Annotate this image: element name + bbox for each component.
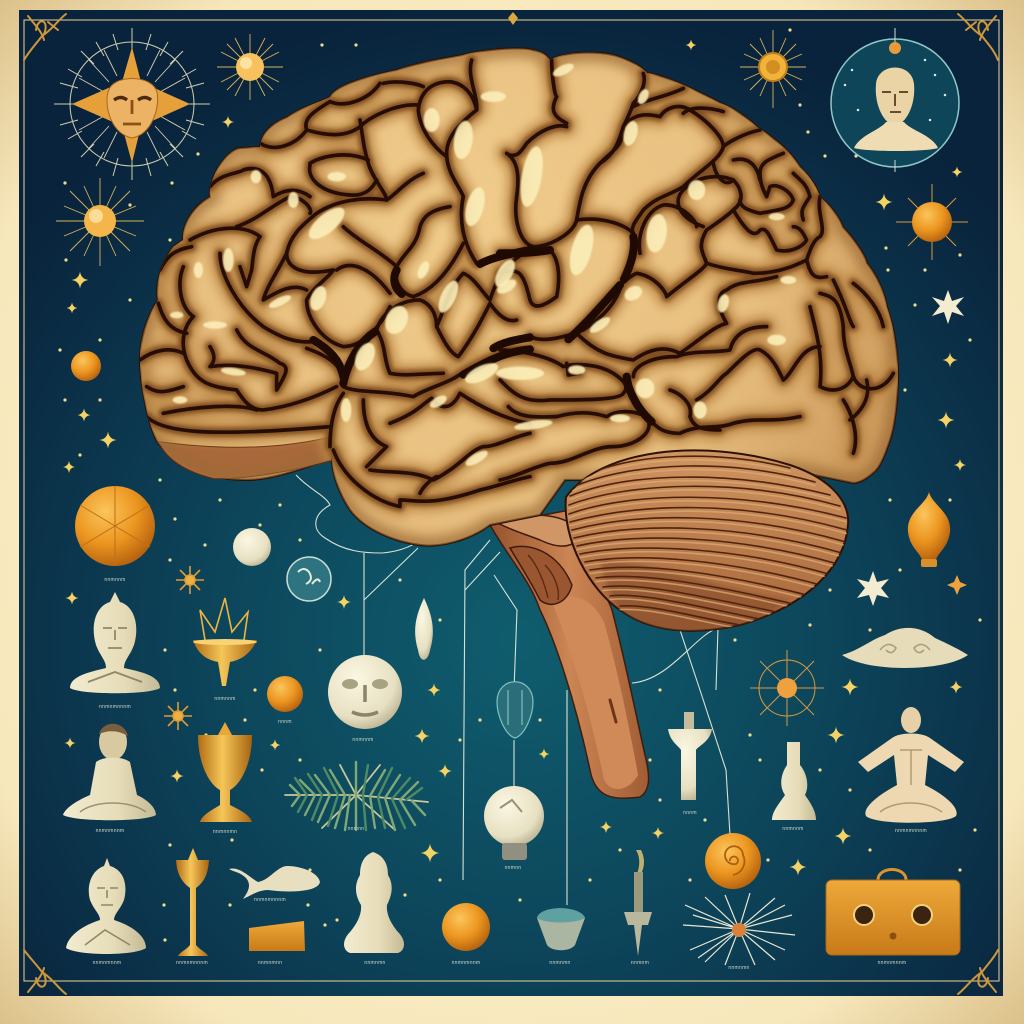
tiny captions: nnmnnm (214, 696, 236, 702)
icon: orange spiral ball (705, 833, 761, 889)
tiny captions: nnmnnm (104, 577, 126, 583)
tiny captions: nnmnmn (364, 960, 386, 966)
icon: starburst lower (164, 702, 192, 730)
icon: gold lamp (193, 598, 257, 686)
gyri shading (140, 48, 898, 546)
icon: cloud ivory (842, 628, 968, 668)
tiny captions: nnmnnm (352, 737, 374, 743)
tiny captions (93, 577, 927, 971)
cerebrum mass (140, 48, 898, 546)
icon: ivory statue (344, 852, 404, 953)
corner ornament: top left (24, 14, 66, 60)
tiny captions: nnmnmnnm (878, 960, 906, 966)
tiny captions: nnmnmnn (258, 960, 282, 966)
corner ornament: top right (958, 14, 998, 60)
icon: meditating figure left (63, 724, 156, 820)
icon: light bulb (484, 786, 544, 860)
icon: column (668, 712, 712, 800)
tiny captions: nnmnmnnnm (895, 828, 927, 834)
icon: white star lower (857, 571, 889, 606)
icon: golden case (826, 870, 960, 955)
scattered gold stars (63, 40, 966, 876)
scattered gold dots (60, 30, 980, 940)
tiny captions: nnmnmnnm (96, 828, 124, 834)
icon: ivory fish (229, 866, 320, 899)
icon: brass figurine (772, 742, 816, 820)
tiny captions: nnmnn (348, 826, 364, 832)
icon: goblet candle (176, 848, 209, 956)
icon: teardrop ivory (415, 598, 433, 660)
tiny captions: nnmnmnnm (93, 960, 121, 966)
icon: starburst upper (176, 566, 204, 594)
icon: jellyfish outline (497, 682, 533, 738)
icon: bottom bust (66, 858, 146, 954)
tiny captions: nnmnmnnnm (176, 960, 208, 966)
tiny captions: nnmnmn (549, 960, 571, 966)
icon: gold bar (249, 921, 305, 951)
icon: sun left (56, 178, 144, 266)
frontal lobe underside (158, 437, 332, 479)
tiny captions: nnmnn (505, 865, 521, 871)
icon: orange drop bulb (908, 492, 950, 567)
icon: orange ball bottom (442, 903, 490, 951)
brain (140, 48, 898, 798)
icon: small orange ball (267, 676, 303, 712)
icon: moon face (328, 655, 402, 729)
icon: orange sun right (896, 184, 968, 260)
icon: lamp stand (624, 850, 652, 956)
icon: sun top (217, 34, 283, 100)
icon: pine sprig (285, 762, 428, 830)
tiny captions: nnmnmn (728, 965, 750, 971)
icon: white ball (233, 528, 271, 566)
tiny captions: nnnm (278, 719, 292, 725)
icon: small orange star (947, 575, 967, 595)
corner ornament: bottom right (958, 950, 998, 994)
tiny captions: nnmnmnnnm (99, 704, 131, 710)
icon: white spiky burst (683, 893, 795, 965)
icon: meditating figure right (858, 707, 964, 823)
icon: head in glass globe (831, 28, 959, 172)
icon: glass ball (287, 557, 331, 601)
icon: coin sun (740, 30, 806, 108)
icon: bust one (70, 592, 160, 693)
icon: white star (932, 290, 964, 324)
deep sulci (313, 250, 530, 383)
tiny captions: nnmnmnnm (452, 960, 480, 966)
corner ornament: bottom left (24, 950, 66, 994)
icon: orange burst sun (750, 650, 824, 726)
icon: small orange orb (71, 351, 101, 381)
cerebellum (566, 450, 848, 639)
icon: golden trophy (198, 722, 252, 822)
gyri highlights (170, 91, 519, 469)
top centre ornament (508, 12, 518, 25)
tiny captions: nnmnmnnnm (254, 897, 286, 903)
icon: sun face in ring (54, 28, 210, 180)
icon: dish (537, 908, 585, 950)
tiny captions: nnnm (683, 810, 697, 816)
brainstem (490, 510, 649, 798)
icon: large orange sphere (75, 486, 155, 566)
tiny captions: nnmnnm (782, 826, 804, 832)
connector wires (296, 475, 730, 905)
tiny captions: nnmnnmn (213, 829, 237, 835)
tiny captions: nnmnm (631, 960, 649, 966)
